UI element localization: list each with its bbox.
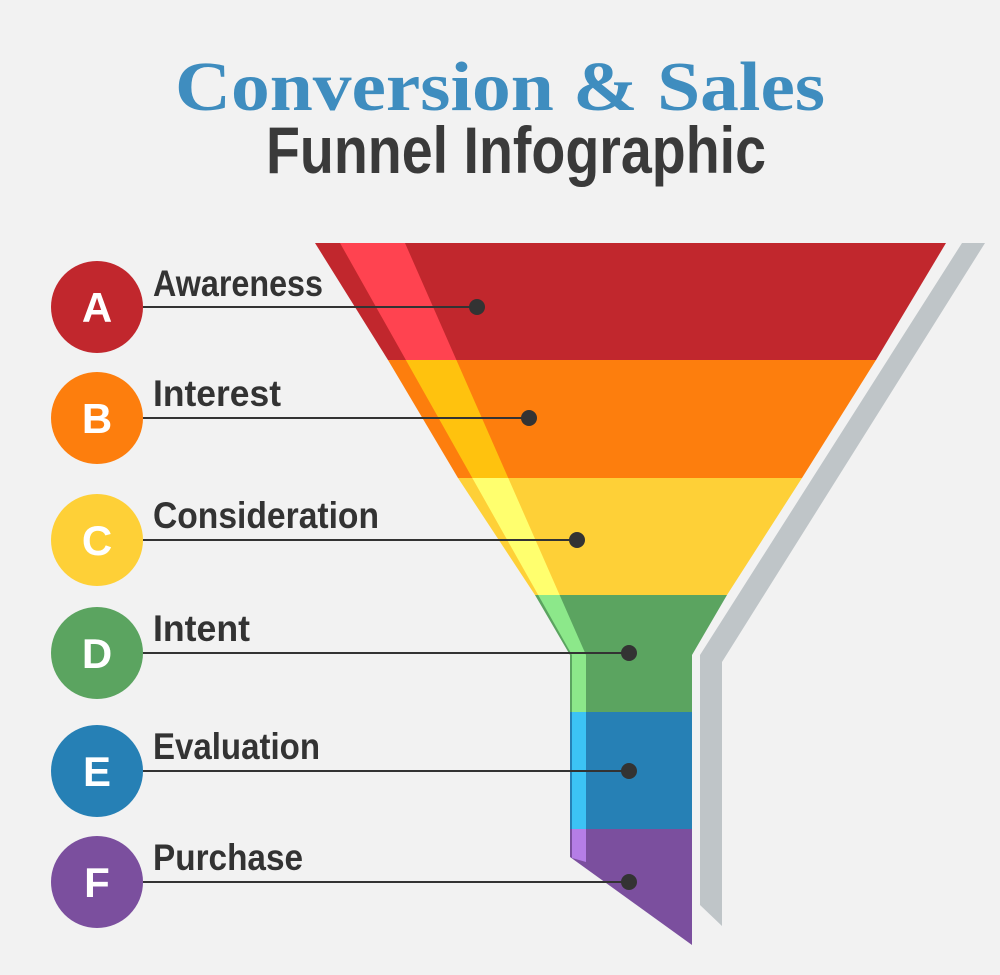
funnel band: intent [535,595,727,712]
funnel shadow [700,243,985,926]
stage E [51,725,637,817]
stage B: Interest [153,373,281,414]
stage C [51,494,585,586]
stage C: Consideration [153,495,379,536]
title: Conversion & Sales [175,49,825,126]
stage F: Purchase [153,837,303,878]
stage C: C [82,517,112,564]
funnel [315,243,946,945]
stage E: Evaluation [153,726,320,767]
stage D: D [82,630,112,677]
stage A: Awareness [153,263,323,304]
funnel band: purchase [570,829,692,945]
stage B [51,372,537,464]
stage E: E [83,748,111,795]
funnel band: evaluation [570,712,692,829]
stage D [51,607,637,699]
stage F: F [84,859,110,906]
stage F [51,836,637,928]
stage B: B [82,395,112,442]
funnel band: awareness [315,243,946,360]
title: Funnel Infographic [266,113,766,187]
funnel band: consideration [458,478,802,595]
stage D: Intent [153,608,250,649]
stage A [51,261,485,353]
title [175,49,825,187]
funnel highlight [340,243,586,862]
funnel band: interest [388,360,876,478]
stage A: A [82,284,112,331]
